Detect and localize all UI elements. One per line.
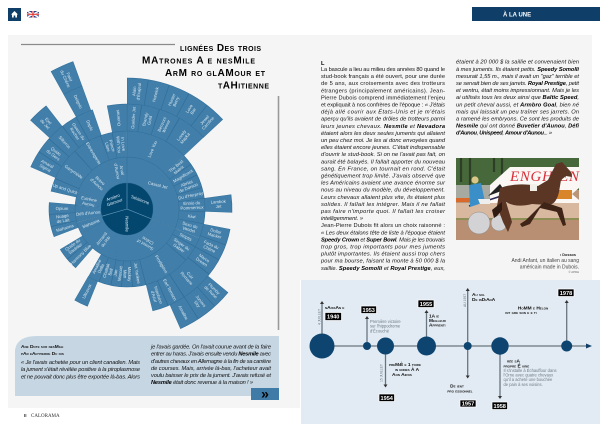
sunburst labels: Ultravox (81, 282, 93, 299)
event: 1954 first win at Vincennes: 1954 (380, 396, 394, 402)
event: 1955 best apprentice: 1955 (420, 302, 432, 308)
page footer: II (24, 413, 27, 418)
sunburst labels: Love You (147, 139, 158, 158)
callout text right (150, 344, 271, 386)
article column 1: pour ma bourse, faisant la monte à 50 000 $ la (320, 259, 445, 265)
article column 1: saillie. Speedy Somolli et Royal Prestige, eux, (321, 266, 445, 272)
button: next arrows (251, 386, 279, 402)
sunburst labels: Sky (193, 300, 202, 309)
sunburst labels: Sigma (39, 163, 52, 173)
callout heading: Ane Dote sur nesMile (21, 344, 63, 350)
event: 1940 birth: nAissAn e (325, 305, 344, 311)
callout text right: voulu baisser le prix de la jument. J'avais refusé et (151, 373, 271, 379)
article column 1: et expliquait à nos confrères de l'époque : « J'étais (321, 102, 445, 108)
page footer: CALORAMA (31, 414, 60, 419)
event: 1953 first win: 1953 (362, 308, 375, 314)
event: 1958 creates stable (491, 337, 557, 410)
sunburst labels: Mahanna (82, 218, 101, 229)
article column 1: Speedy Crown et Super Bowl. Mais je les trouvais (321, 237, 445, 243)
sunburst labels: Delgolo (73, 94, 84, 110)
sunburst labels: de Lait (56, 217, 71, 224)
event: 1954 first win at Vincennes: 15 JUILLET (380, 364, 384, 382)
callout text left: « Je l'avais achetée pour un client canadien. Mais (21, 360, 140, 366)
event: 1955 best apprentice (417, 300, 447, 356)
sunburst labels: With You (115, 136, 122, 154)
sunburst labels: Quido du (64, 238, 81, 252)
event: 1940 birth (310, 301, 344, 358)
article column 1: stud-book français a été ouvert, pour une durée (321, 74, 445, 80)
sunburst labels: Dollar (210, 227, 222, 235)
sunburst labels: Lambok (210, 199, 226, 205)
sunburst labels: Bar (189, 107, 197, 115)
event: 1978: HoMM e Helon (518, 306, 548, 312)
callout: anecdote sur Nesmile (15, 336, 279, 402)
sunburst ring 1 (74, 156, 180, 262)
article column 2: ai utilisés tous les deux ainsi que Baltic Speed, (456, 95, 579, 101)
sunburst labels: Man (122, 270, 127, 279)
article column 1: Leurs chevaux allaient plus vite, ils étaient plus (321, 195, 445, 201)
sunburst labels: Gold (146, 115, 153, 125)
article column 1: leurs jeunes chevaux. Nesmile et Nevadora (321, 124, 445, 130)
sunburst ring 4 and outer ring (0, 13, 323, 405)
photo: trotter and sulky (456, 158, 580, 240)
sunburst labels: Arval (119, 165, 125, 176)
article column 2: d'Aunou, Unispeed, Amour d'Aunou... » (456, 131, 552, 137)
button: next arrows: » (261, 386, 269, 402)
section tag: à la une (472, 7, 600, 21)
sunburst labels: Aunou (82, 200, 95, 208)
title: ArM ro glAMour et (165, 68, 266, 79)
article column 2: étaient à 20 000 $ la saillie et convenaient bien (456, 60, 579, 66)
sunburst labels: Du d'Herpray (178, 190, 204, 201)
callout text left: la jument s'était révélée positive à la piroplasmose (21, 367, 140, 373)
article column 1: les Américains avaient une avance énorme sur (321, 181, 446, 187)
vertical rule (278, 96, 280, 330)
sunburst labels (38, 67, 227, 321)
article column 1: L (321, 61, 325, 67)
icon: UK flag (27, 11, 39, 18)
sunburst labels: Nuage (56, 213, 69, 220)
event: 1955 best apprentice: Meilleur (429, 318, 447, 324)
sunburst labels: Saulnier (67, 242, 84, 255)
photo caption: Andi Anfant, un italien au sang (511, 258, 579, 264)
sunburst labels: Daple (85, 119, 95, 132)
sunburst labels: Guelder Jet (130, 106, 137, 129)
sunburst labels: Mahanna (56, 223, 75, 233)
event: 1957 becomes professional: De inDiAnA (472, 297, 496, 303)
sunburst labels: Gabier (172, 242, 186, 254)
sunburst labels: d'Aunou (89, 177, 105, 192)
article column 1: de 5 ans, aux croisements avec des trotteurs (321, 81, 445, 87)
sunburst labels: Lovely (176, 129, 187, 142)
icon: home button (8, 8, 21, 21)
sunburst labels: Ejet (44, 117, 53, 125)
photo caption: © APRH (569, 270, 579, 274)
sunburst labels: Juniors (195, 294, 207, 308)
page footer (24, 413, 60, 419)
sunburst labels: Love (185, 103, 194, 114)
sunburst labels: Prodigious (154, 254, 169, 274)
sunburst labels: Fada du (203, 239, 220, 250)
photo caption: américain made in Dubois. (520, 264, 579, 270)
sunburst labels: de Rose (203, 285, 219, 300)
event: 1958 creates stable: l'Orne avec quatre chevaux (504, 373, 553, 378)
sunburst labels: Sexo de (182, 220, 198, 230)
article column 1: d'ouvrir le stud-book. Si on ne l'avait pas fait, on (321, 152, 445, 158)
sunburst labels: Kiwi (187, 213, 196, 219)
sunburst labels: Cassal Jet (147, 180, 169, 190)
article column 1: aurait été balayés. Il fallait apporter du nouveau (321, 159, 446, 165)
sunburst labels: de Jet (39, 118, 51, 131)
article column 2: un petit cheval aussi, et Armbro Goal, bien né (456, 102, 579, 108)
sunburst labels: Matrix (173, 164, 186, 175)
article column 1: Pierre Dubois comprend immédiatement l'enjeu (321, 95, 445, 101)
sunburst labels: Dalla (97, 263, 106, 274)
sunburst labels: du Gers (46, 148, 61, 162)
article column 1 (320, 61, 446, 272)
sunburst labels: Dream (195, 256, 209, 268)
article column 1: elles étaient encore jeunes. C'était indispensable (321, 145, 445, 151)
article column 1: déjà allé courir aux États-Unis et je m'étais (321, 109, 445, 116)
article column 1: « Les deux étalons tête de liste à l'époque étaient (321, 230, 445, 236)
sunburst labels: Glamour (106, 197, 124, 207)
article column 1: La bascule a lieu au milieu des années 80 quand le (321, 67, 445, 73)
sunburst labels: Nesmile (124, 216, 130, 232)
event: 1978: 1978 (560, 291, 572, 297)
callout text left (21, 360, 140, 380)
sunburst labels: Cuir (186, 271, 195, 280)
sunburst labels: du Rib (100, 235, 112, 248)
sunburst sector outlines (0, 13, 323, 405)
sunburst labels: Mayka (179, 131, 191, 145)
sunburst labels: Hunter (167, 93, 177, 107)
sunburst labels: Prince (108, 139, 116, 152)
sunburst labels: de Dorson (178, 182, 199, 194)
sunburst labels: The Best (168, 159, 184, 174)
sunburst labels: Sunset of (136, 238, 154, 252)
sunburst labels: du Chêne (59, 69, 72, 89)
sunburst labels: Ourenas (115, 109, 122, 126)
event: 1978: int gre son e e ti (505, 311, 537, 316)
sunburst labels: Macker (207, 231, 223, 240)
sunburst labels: Défi d'Aunou (76, 209, 101, 217)
sunburst labels: Jan (113, 269, 118, 277)
sunburst labels: Libre (104, 142, 111, 153)
event: 1953 first win (361, 306, 401, 350)
sunburst labels: Up and Quick (52, 183, 79, 196)
event: 1953 first win: Première victoire (370, 319, 401, 324)
event: 1957 becomes professional (447, 288, 496, 408)
event: 1958 creates stable: qu'il a acheté une bouchée (504, 377, 553, 382)
event: 1940 birth: 4 JUILLET (318, 309, 322, 325)
article column 1: Jean-Pierre Dubois fit alors un choix raisonné : (321, 223, 445, 229)
sunburst labels: Striptis (179, 232, 193, 242)
article column 1: nous au niveau du modèle, du développement. (321, 188, 445, 194)
article column 1: aperçu qu'ils avaient de drôles de trotteurs parmi (321, 117, 446, 123)
sunburst labels: Armbro (106, 193, 121, 202)
event: 1955 best apprentice: 1A ie (429, 314, 439, 320)
title: MAtrones A e nesMile (142, 56, 255, 66)
callout heading (21, 344, 64, 357)
article column 1: étaient alors les deux seules juments qui allaient (321, 131, 445, 137)
sunburst labels: Quido (50, 146, 62, 157)
sunburst labels: Plumby (207, 282, 221, 295)
sunburst labels: Alain (131, 86, 137, 96)
sunburst labels: In Love (120, 137, 126, 151)
article column 2: Nesmile qui ont donné Buvetier d'Aunou, Défi (456, 124, 579, 130)
photo caption: • Dossos (560, 253, 576, 257)
article column 2 (456, 60, 579, 137)
event: 1958 creates stable: de pain à ses voisins. (504, 382, 543, 387)
section tag: à la une: À LA UNE (503, 12, 531, 18)
article column 1: un peu chez moi. Je les ai donc envoyées quand (321, 138, 446, 144)
sunburst labels: Berry (172, 95, 181, 107)
sunburst labels: Earl Tomson (162, 278, 178, 302)
sunburst labels: Singer du (173, 237, 191, 252)
sunburst chart (0, 13, 323, 405)
sunburst labels: Brandy (141, 112, 149, 126)
event: 1957 becomes professional: Au sul (472, 292, 485, 298)
sunburst labels: Chêne (140, 235, 154, 246)
sunburst labels: Opium (56, 206, 69, 211)
sunburst labels: Jet Yankee (133, 262, 141, 285)
callout text right: d'autres chevaux en Allemagne à la fin de sa carrière (151, 359, 271, 365)
article column 1: intelligemment. » (321, 216, 363, 222)
sunburst labels: Winner (161, 119, 171, 134)
sunburst labels: Armand (95, 231, 108, 246)
sunburst labels: Chattak (102, 263, 111, 278)
sunburst labels: Magnificent (172, 168, 194, 184)
callout text left: et ne pouvait donc plus être exportée là-bas. Alors (21, 374, 140, 380)
article column 2: et ventru, était moins impressionnant. Mais je les (456, 88, 579, 94)
sunburst labels: Rocher (69, 127, 81, 141)
event: 1957 becomes professional: pro essionnel (447, 390, 473, 394)
sunburst labels: Benzoni (156, 116, 167, 133)
sunburst labels: Extravagante (85, 141, 102, 166)
sunburst labels: d'Aunou (113, 163, 121, 180)
event: 1958 creates stable: 1958 (493, 404, 506, 410)
event: 1953 first win: d'Écouché (370, 328, 390, 333)
callout text right: je l'avais gardée. On l'avait courue avant de la faire (150, 344, 271, 350)
article column 2: mais qui laissait un peu traîner ses jarrets. On (456, 109, 579, 115)
event: 1957 becomes professional: AU 1957 (463, 294, 467, 307)
event: 1953 first win: sur l'hippodrome (370, 324, 401, 329)
photo: trotter and sulky: ENGHIEN (509, 169, 580, 185)
event: 1957 becomes professional: De ient (450, 384, 464, 390)
article column 1: génétiquement trop limité. J'avais observé que (321, 174, 445, 180)
event: 1940 birth: 1940 (327, 315, 339, 321)
sunburst labels: Jewel (199, 114, 210, 126)
sunburst labels: Caroline (201, 115, 216, 131)
sunburst labels: d'Écajeul (136, 83, 142, 100)
sunburst labels: Mackay (127, 267, 132, 281)
sunburst ring 2 (35, 117, 219, 301)
timeline axis (322, 344, 592, 348)
article column 1: solides. Il fallait les intégrer. Mais il ne fallait (321, 202, 445, 208)
sunburst labels: Vandel (182, 225, 196, 234)
sunburst labels: Gwenn du (71, 122, 86, 141)
callout text right: Nesmile était donc revenue à la maison ! » (151, 380, 253, 386)
sunburst labels: Harmony Blue (69, 243, 93, 266)
article column 2: se servait bien de ses jarrets. Royal Prestige, petit (456, 81, 579, 87)
callout text right: de courses. Mais, arrivée là-bas, l'acheteur avait (151, 366, 271, 372)
article column 2: à mes juments. Ils étaient petits. Speedy Somolli (456, 67, 579, 73)
sunburst labels: Romane (179, 271, 194, 287)
event: 1954 first win at Vincennes: in ennes À A (395, 366, 420, 373)
title: lignées Des trois (180, 43, 261, 54)
sunburst labels: Abrias (180, 179, 193, 188)
article column 1: sang. En France, on tournait en rond. C'était (321, 166, 445, 172)
event: 1957 becomes professional: 1957 (462, 402, 474, 408)
article column 2: a ramené les embryons. Ce sont les produits de (456, 116, 579, 122)
event: 1958 creates stable: propre É urie (504, 362, 529, 370)
article column 2: mesurait 1,55 m., mais il avait un "gaz" terrible et (456, 74, 579, 80)
sunburst labels: Amaline (91, 259, 102, 275)
sunburst labels: Fakir (65, 72, 74, 82)
sunburst labels: Chêne (203, 244, 217, 254)
timeline panel (301, 280, 600, 424)
event: 1954 first win at Vincennes (377, 338, 421, 402)
callout text right: entrer au haras. J'avais ensuite vendu Nesmile avec (151, 352, 271, 358)
sunburst labels: Bell (107, 268, 114, 276)
callout heading: pAr eAn-pierre Du ois (21, 351, 64, 357)
sunburst labels: Impulsion (153, 285, 164, 304)
event: 1958 creates stable: rée sA (507, 358, 521, 364)
sunburst labels: Jet (215, 204, 222, 209)
event: 1954 first win at Vincennes: preMiÈ e 1 toire (389, 360, 421, 368)
sunburst labels: Ennio du (183, 200, 200, 206)
sunburst labels: Amaral (40, 158, 55, 169)
sunburst labels: Extrême (81, 195, 98, 203)
sunburst labels: d'Azur (150, 290, 159, 303)
photo caption (511, 253, 579, 274)
sunburst labels: Hotwick (151, 86, 160, 102)
event: 1954 first win at Vincennes: Aon Airos (392, 372, 412, 378)
title (21, 43, 269, 92)
event: 1955 best apprentice: Apprenti (429, 322, 446, 328)
article column 1: plutôt importantes. Ils étaient aussi trop chers (320, 252, 445, 258)
sunburst labels: Ganymède (64, 164, 84, 180)
sunburst centre: three mares (101, 183, 153, 235)
sunburst labels: Tahitienne (130, 194, 151, 206)
article column 1: trop gros, trop importants pour mes juments (321, 244, 445, 250)
sunburst labels: Marco (198, 253, 211, 264)
sunburst labels: Pommereux (180, 205, 205, 211)
event: 1978 (505, 289, 574, 352)
article column 1: étrangers (principalement américains). Jean- (321, 88, 445, 94)
article column 1: pas faire n'importe quoi. Il fallait les croiser (320, 209, 446, 215)
sunburst labels: Mascott (117, 265, 124, 281)
event: 1958 creates stable: Il s'installe à Échauffour dans (504, 368, 557, 373)
sunburst labels: Silkeros (58, 135, 72, 149)
sunburst labels: Amaline (177, 305, 189, 321)
sunburst labels: Bravo (94, 175, 106, 186)
sunburst ring 3 (0, 80, 256, 338)
title: tAHitienne (218, 80, 269, 92)
